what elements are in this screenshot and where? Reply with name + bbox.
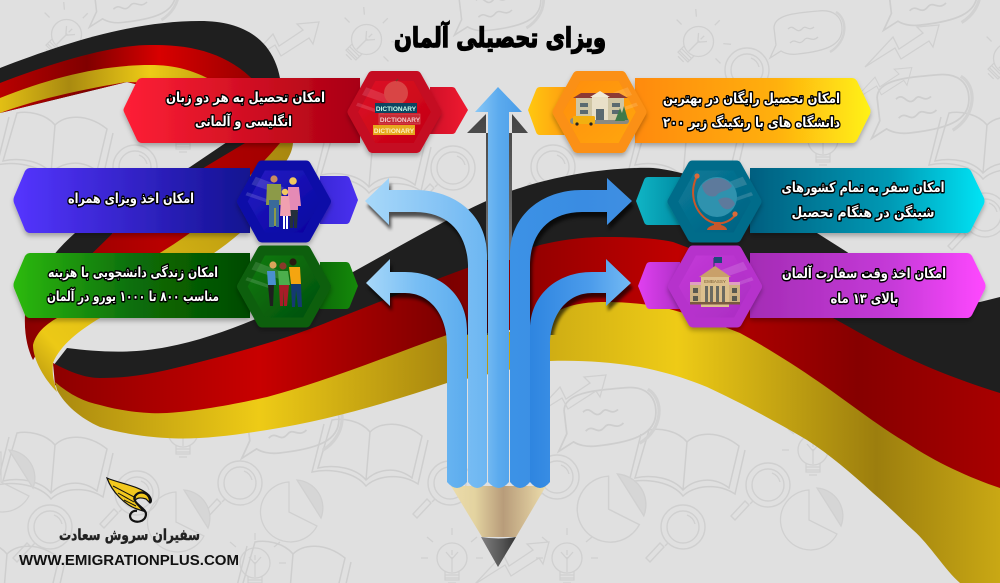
icon: family — [266, 175, 301, 229]
text: امکان سفر به تمام کشورهای — [782, 180, 944, 196]
icon: winged bird — [107, 478, 151, 522]
icon: embassy — [690, 257, 740, 307]
ribbon: top loop — [0, 21, 282, 113]
icon: dictionaries and apple: DICTIONARY — [376, 106, 417, 113]
website url: WWW.EMIGRATIONPLUS.COM — [19, 553, 239, 569]
ribbon body — [635, 78, 870, 143]
tab — [638, 262, 680, 309]
text: امکان تحصیل رایگان در بهترین — [663, 90, 840, 107]
text — [166, 90, 325, 130]
ribbon: back strand — [25, 140, 293, 392]
tab — [430, 87, 468, 134]
pencil lead tip — [481, 537, 516, 567]
ribbon: black band — [53, 168, 1000, 400]
panel: blue (companion visa) — [14, 166, 358, 238]
tab — [636, 177, 680, 225]
logo — [19, 478, 239, 569]
text: انگلیسی و آلمانی — [195, 113, 292, 130]
arrow: lower left — [366, 259, 467, 488]
icon: dictionaries and apple: DICTIONARY — [380, 117, 421, 124]
text — [663, 90, 840, 131]
text — [782, 265, 946, 307]
text: امکان اخذ ویزای همراه — [68, 191, 194, 207]
icon: globe — [693, 173, 738, 230]
arrow: lower right — [530, 259, 631, 488]
center arrow shadow — [467, 114, 528, 260]
ribbon: gold band — [55, 302, 1000, 583]
hexagon — [237, 250, 326, 322]
hexagon — [673, 250, 762, 322]
tab — [320, 176, 358, 224]
arrow: upper right — [510, 178, 632, 488]
arrow: center up — [475, 87, 522, 488]
icon: students — [267, 258, 302, 307]
text — [47, 264, 219, 305]
ribbon body — [124, 78, 360, 143]
icon: embassy: EMBASSY — [704, 279, 726, 284]
text — [782, 180, 944, 221]
panel: green (student living) — [14, 250, 358, 322]
arrow: upper left — [365, 178, 487, 488]
hexagon — [672, 166, 762, 238]
text: امکان اخذ وقت سفارت آلمان — [782, 265, 946, 282]
hexagon — [237, 166, 326, 238]
hexagon — [348, 76, 436, 148]
text: بالای ۱۳ ماه — [830, 291, 898, 307]
text: دانشگاه های با رنکینگ زیر ۲۰۰ — [663, 114, 840, 131]
text: امکان تحصیل به هر دو زبان — [166, 90, 325, 106]
icon: dictionaries and apple — [373, 79, 421, 135]
pencil wood — [451, 486, 546, 537]
hexagon — [558, 76, 646, 148]
icon: university building — [570, 91, 629, 126]
text: شینگن در هنگام تحصیل — [792, 204, 934, 221]
arrow shadows — [366, 182, 634, 335]
ribbon body — [14, 168, 250, 233]
text: امکان زندگی دانشجویی با هزینه — [48, 264, 218, 281]
title: ویزای تحصیلی آلمان — [394, 21, 606, 54]
text: مناسب ۸۰۰ تا ۱۰۰۰ یورو در آلمان — [47, 288, 219, 305]
ribbon: red band — [53, 237, 1000, 495]
ribbon body — [750, 253, 986, 318]
panel: magenta (embassy appointment) — [638, 250, 986, 322]
panel: orange (free study) — [528, 76, 870, 148]
tab — [320, 262, 358, 309]
icon: dictionaries and apple: DICTIONARY — [374, 128, 415, 135]
company name: سفیران سروش سعادت — [59, 526, 200, 544]
ribbon body — [14, 253, 250, 318]
central pencil with arrows — [365, 87, 634, 567]
tab — [528, 87, 570, 135]
panel: teal (schengen travel) — [636, 166, 984, 238]
panel: red (two languages) — [124, 76, 468, 148]
ribbon body — [750, 168, 984, 233]
